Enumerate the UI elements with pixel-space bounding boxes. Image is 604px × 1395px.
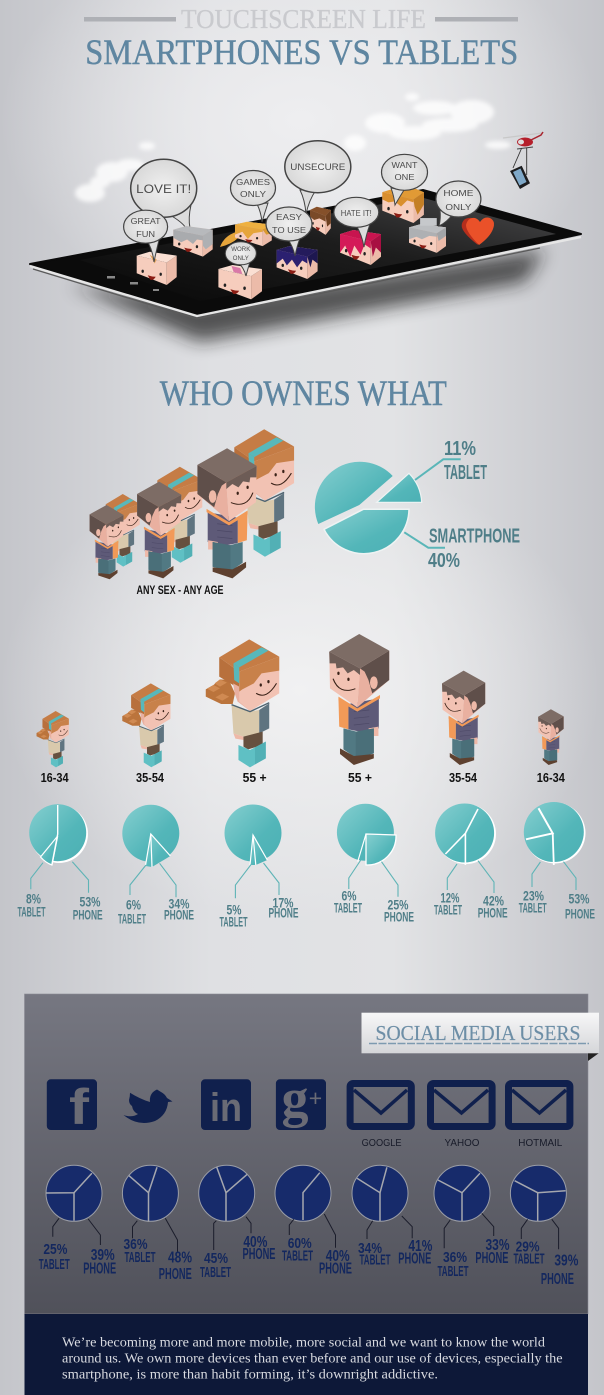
bubble: easy to use: EASY (276, 212, 302, 222)
social pie: twitter: 36% (124, 1236, 148, 1253)
social pie: facebook: 39% (91, 1247, 115, 1264)
social pie: google mail: 34% (358, 1240, 382, 1257)
age pie 1: female 16-34: TABLET (18, 904, 46, 920)
social pie: yahoo mail: TABLET (438, 1263, 468, 1280)
age labels: 16-34 (537, 770, 565, 785)
social pie: hotmail: 29% (516, 1238, 540, 1256)
age pie 5: male 35-54: 42% (483, 892, 504, 908)
label: tablet share: TABLET (444, 462, 487, 484)
age pie 5: male 35-54 (434, 804, 508, 920)
social pie: twitter (122, 1165, 192, 1283)
social pie: hotmail: 39% (554, 1252, 579, 1270)
age pie 1: female 16-34: 53% (80, 894, 101, 910)
mail labels: HOTMAIL (518, 1137, 562, 1149)
social pie: linkedin: 40% (243, 1234, 268, 1251)
bubble: work only (225, 242, 256, 276)
bubble: unsecure (285, 141, 351, 214)
head: grey bun (409, 218, 446, 253)
social pie: facebook (39, 1165, 116, 1278)
bubble: easy to use (266, 207, 312, 256)
label: tablet share (444, 438, 487, 484)
bubble: great fun: FUN (136, 229, 155, 239)
bubble: work only: WORK (231, 247, 250, 253)
age pie 2: female 35-54: 34% (168, 896, 190, 912)
social pie: google plus: TABLET (282, 1248, 313, 1264)
mail labels: GOOGLE (362, 1137, 402, 1149)
age labels: 55 + (243, 770, 267, 785)
icon: heart (462, 218, 494, 245)
age pie 4: male 55+: TABLET (334, 900, 362, 916)
age pie 2: female 35-54: TABLET (118, 912, 146, 926)
icon: linkedin (201, 1079, 251, 1130)
icon: helicopter carrying phone (503, 132, 543, 189)
age labels: 35-54 (449, 770, 478, 785)
icon: google mail (350, 1084, 411, 1126)
main title: SMARTPHONES VS TABLETS (85, 32, 518, 72)
label: smartphone share: SMARTPHONE (429, 526, 520, 548)
bubble: unsecure: UNSECURE (290, 162, 345, 172)
age pie 5: male 35-54: TABLET (434, 902, 462, 918)
age labels: 55 + (348, 770, 372, 785)
bubble: home only: HOME (443, 188, 474, 198)
age pie 4: male 55+: 6% (342, 888, 356, 904)
social pie: google plus: PHONE (319, 1260, 352, 1278)
family group figure (90, 429, 294, 579)
icon: google plus: g (282, 1068, 308, 1128)
social pie: google mail: TABLET (360, 1252, 390, 1268)
icon: yahoo mail (430, 1084, 492, 1126)
title kicker: Touchscreen Life (84, 4, 518, 34)
head: great fun (137, 252, 177, 285)
age pie 4: male 55+: 25% (388, 896, 409, 912)
mail labels: YAHOO (444, 1137, 480, 1149)
social pie: yahoo mail: 33% (486, 1237, 510, 1254)
icon: twitter bird (124, 1090, 172, 1123)
hero illustration: tablet with characters (30, 93, 581, 342)
age pie 6: male 16-34: TABLET (519, 900, 547, 916)
age pie 3: female 55+: 5% (226, 902, 242, 918)
icon: linkedin: in (210, 1086, 242, 1130)
social pie: facebook: 25% (43, 1241, 67, 1258)
age pie 1: female 16-34: PHONE (73, 906, 103, 922)
age pie 6: male 16-34 (519, 802, 595, 922)
female figures by age (37, 639, 279, 767)
age pie 2: female 35-54: PHONE (164, 906, 194, 922)
clouds (75, 93, 511, 202)
label: smartphone share (428, 526, 520, 572)
social pie: linkedin: PHONE (242, 1246, 276, 1263)
social pie: twitter: TABLET (124, 1249, 156, 1266)
age pie 5: male 35-54: PHONE (478, 904, 508, 920)
social pie: linkedin: 45% (204, 1250, 228, 1267)
tablet shadow (70, 250, 545, 342)
caption: any sex any age: ANY SEX - ANY AGE (136, 583, 224, 597)
social pie: yahoo mail (434, 1165, 510, 1280)
bubble: want one: ONE (394, 172, 415, 182)
age pie 3: female 55+: TABLET (220, 914, 248, 930)
social pie: google mail: 41% (408, 1238, 433, 1255)
footer text: around us. We own more devices than ever before and our use of devices, especially the (62, 1350, 563, 1366)
icon: google plus (276, 1068, 326, 1130)
social pie: linkedin (199, 1165, 276, 1281)
social pie: twitter: PHONE (159, 1266, 192, 1283)
overall pie chart (315, 438, 520, 572)
bubble: work only: ONLY (233, 256, 249, 262)
age pie 4: male 55+: PHONE (384, 908, 414, 924)
social pie: yahoo mail: 36% (443, 1249, 467, 1266)
footer text: We’re becoming more and more mobile, more social and we want to know the world (62, 1334, 545, 1350)
ribbon: social media users (362, 1013, 599, 1061)
label: tablet share: 11% (444, 438, 476, 460)
age labels: 35-54 (136, 770, 165, 785)
bubble: easy to use: TO USE (272, 225, 306, 235)
age pie 1: female 16-34: 8% (26, 892, 41, 906)
icon: facebook: f (69, 1079, 89, 1135)
age pie 3: female 55+ (220, 804, 298, 930)
ribbon: social media users: SOCIAL MEDIA USERS (376, 1021, 580, 1045)
head: work only (218, 265, 262, 299)
bubble: want one: WANT (392, 160, 418, 170)
icon: hotmail (508, 1084, 570, 1126)
age pie 3: female 55+: 17% (272, 894, 294, 910)
age pie 2: female 35-54 (118, 805, 194, 926)
social pie: google plus (275, 1165, 352, 1278)
age labels: 16-34 (41, 770, 69, 785)
bubble: great fun (124, 210, 168, 262)
footer panel (24, 1314, 588, 1395)
social pie: twitter: 48% (168, 1250, 192, 1266)
bubble: games only: ONLY (240, 189, 266, 199)
age pie 2: female 35-54: 6% (126, 898, 141, 912)
bubble: want one (382, 154, 428, 205)
bubble: home only (436, 181, 481, 226)
head: blonde with pigtail (220, 222, 272, 247)
icon: google plus: + (309, 1085, 322, 1111)
label: smartphone share: 40% (428, 550, 460, 572)
social pie: hotmail: PHONE (541, 1271, 574, 1288)
age pie 5: male 35-54: 12% (440, 890, 460, 906)
social pie: hotmail (510, 1165, 579, 1288)
bubble: games only (230, 170, 276, 222)
social pie: google plus: 60% (288, 1235, 312, 1252)
footer text (62, 1334, 563, 1382)
heading: who ownes what: WHO OWNES WHAT (160, 373, 447, 413)
mail labels (362, 1137, 562, 1149)
bubble: love it: LOVE IT! (136, 182, 191, 196)
age pie 3: female 55+: PHONE (268, 904, 298, 920)
bubble: love it (131, 159, 197, 228)
age pie 1: female 16-34 (18, 804, 103, 922)
bubble: hate it: HATE IT! (341, 209, 372, 218)
age pie 6: male 16-34: 23% (523, 888, 544, 904)
bubble: games only: GAMES (236, 177, 270, 187)
social pie: google mail: PHONE (398, 1250, 431, 1268)
social pie: yahoo mail: PHONE (475, 1250, 508, 1267)
title kicker: Touchscreen Life: TOUCHSCREEN LIFE (181, 4, 426, 34)
social pie: google mail (352, 1165, 433, 1268)
male figures by age (329, 634, 564, 765)
bubble: home only: ONLY (445, 202, 472, 212)
icon: facebook (47, 1079, 97, 1135)
social pie: linkedin: TABLET (200, 1264, 231, 1281)
head: navy hair (277, 246, 318, 279)
age labels (41, 770, 565, 785)
bubble: great fun: GREAT (131, 216, 161, 226)
social pie: google plus: 40% (326, 1248, 350, 1265)
age pie 4: male 55+ (334, 804, 414, 924)
bubble: hate it (334, 197, 379, 247)
head: crimson hair (340, 230, 381, 265)
age pie 6: male 16-34: 53% (568, 890, 590, 906)
head: brown hair (310, 207, 331, 235)
panel: social media users (24, 994, 599, 1314)
social pie: facebook: TABLET (39, 1256, 70, 1273)
tablet body (30, 190, 581, 319)
footer text: smartphone, is more than habit forming, it’s downright addictive. (62, 1366, 438, 1382)
head: orange blond hair (382, 180, 424, 223)
head: grey hair (173, 226, 213, 257)
social pie: facebook: PHONE (83, 1260, 116, 1278)
social pie: hotmail: TABLET (514, 1250, 544, 1268)
